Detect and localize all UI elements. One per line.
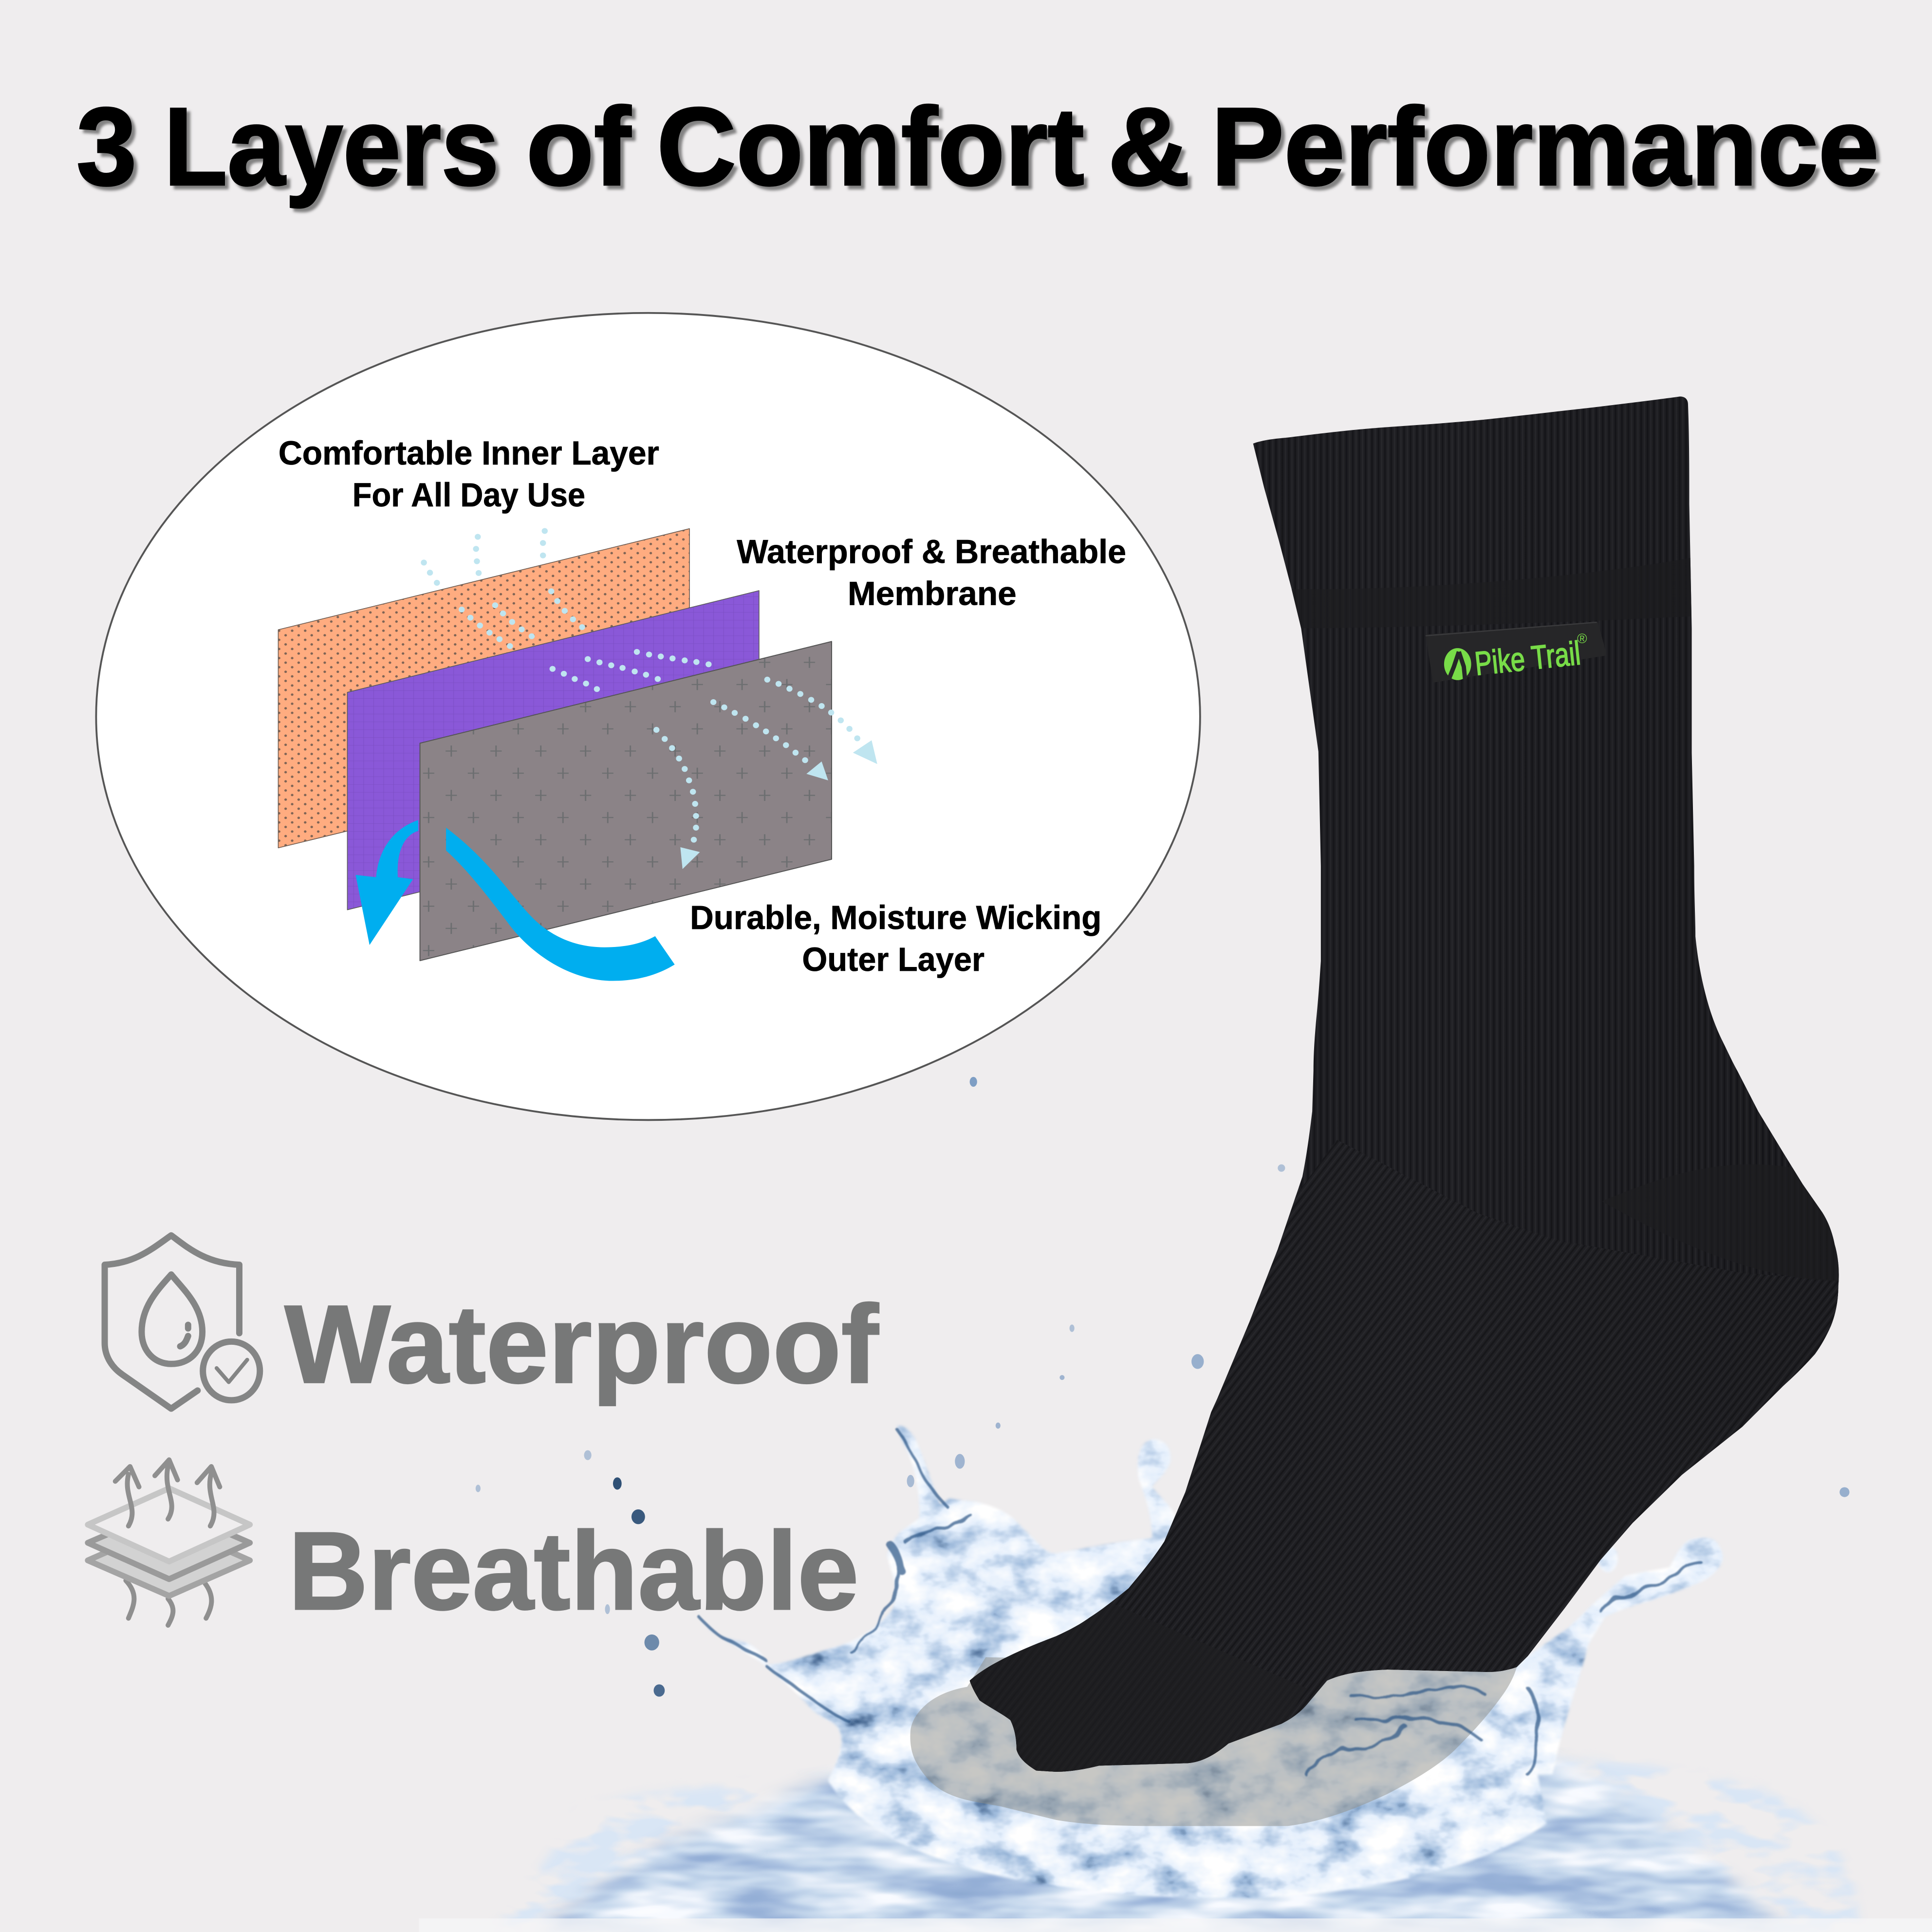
label: membrane xyxy=(737,533,1126,613)
layer: grey outer fabric xyxy=(420,641,832,961)
foot ribbing xyxy=(961,1140,1848,1774)
title: Comfort xyxy=(657,85,1084,209)
faint outer mist xyxy=(493,1756,1860,1932)
bottom white strip xyxy=(419,1918,1932,1932)
label: outer layer xyxy=(690,899,1101,978)
brand label: Pike Trail xyxy=(1426,622,1607,683)
rippled water pool xyxy=(542,1756,1786,1932)
label: outer layer: Outer Layer xyxy=(802,941,985,978)
arrow: moisture wicked down xyxy=(355,820,418,945)
word: Breathable: Breathable xyxy=(288,1509,859,1633)
dotted airflow arrows xyxy=(421,528,877,869)
left tall spike xyxy=(897,1426,955,1534)
translucent grey contact shadow xyxy=(910,1657,1517,1826)
right spike xyxy=(1516,1538,1723,1774)
title: & xyxy=(1108,85,1190,209)
smooth cuff band xyxy=(1282,557,1695,629)
label: membrane: Membrane xyxy=(848,576,1017,613)
sock xyxy=(961,382,1860,1786)
icon: layered fabric with rising air xyxy=(88,1460,250,1625)
layer: purple membrane xyxy=(347,591,759,910)
feature: waterproof xyxy=(105,1235,879,1409)
smooth toe xyxy=(961,1602,1306,1774)
label: inner layer: Comfortable Inner Layer xyxy=(279,435,659,472)
title: Layers xyxy=(164,85,499,209)
sock side shading xyxy=(961,382,1860,1786)
title: of xyxy=(526,85,632,209)
layer: orange inner fabric xyxy=(278,529,689,848)
brand label: Pike Trail: Pike Trail xyxy=(1473,634,1582,683)
diagram: three fabric layers with airflow xyxy=(278,528,877,981)
title xyxy=(76,85,1879,209)
sock leg ribbing xyxy=(961,382,1860,1786)
panel: layer diagram ellipse xyxy=(96,313,1200,1120)
label: inner layer xyxy=(279,435,659,514)
smooth heel xyxy=(1602,1164,1848,1282)
feature: breathable xyxy=(88,1460,859,1633)
ball and stem spike xyxy=(1138,1439,1177,1540)
label: inner layer: For All Day Use xyxy=(353,477,585,514)
label: outer layer: Durable, Moisture Wicking xyxy=(690,899,1101,936)
droplets xyxy=(476,1077,1849,1697)
title: Performance xyxy=(1211,85,1879,209)
water splash xyxy=(476,1077,1860,1932)
icon: shield with droplet and check xyxy=(105,1235,260,1409)
arrow: moisture swoosh xyxy=(446,828,675,981)
logo mark xyxy=(1444,648,1471,680)
title: 3 xyxy=(76,85,137,209)
small right droplet xyxy=(1598,1545,1618,1572)
label: membrane: Waterproof & Breathable xyxy=(737,533,1126,570)
crown of water xyxy=(701,1426,1723,1898)
brand label: Pike Trail: ® xyxy=(1577,631,1587,646)
dark water lines xyxy=(701,1430,1700,1774)
word: Waterproof: Waterproof xyxy=(285,1282,879,1406)
